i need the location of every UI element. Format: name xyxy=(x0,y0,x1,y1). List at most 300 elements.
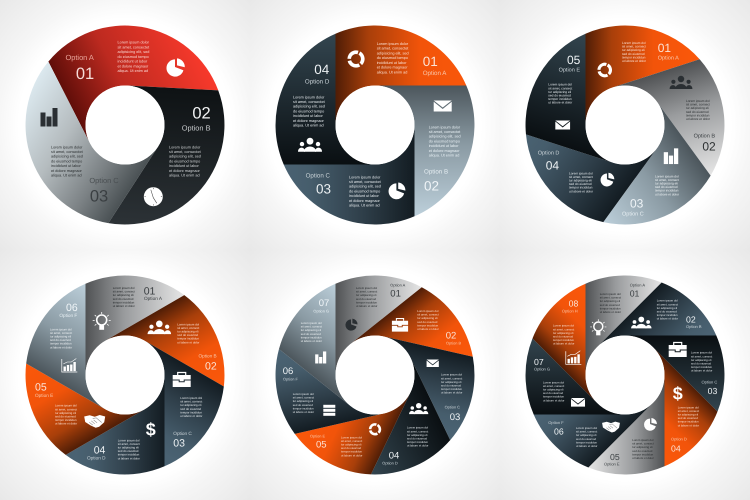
segment: 04 Option D: sed do eiusmod xyxy=(118,449,139,453)
segment: 05 Option E: Lorem ipsum dol xyxy=(55,404,77,408)
segment: 04 Option D: 04 xyxy=(94,444,106,456)
segment: 04 Option D: tempor incididun xyxy=(118,453,140,457)
segment: 08 Option H: Lorem ipsum dol xyxy=(553,324,574,328)
segment: 07 Option G: Lorem ipsum dol xyxy=(543,380,564,384)
segment: 02 Option B: sed do eiusmod xyxy=(177,333,198,337)
segment: 02 Option B: tur adipiscing eli xyxy=(417,316,438,320)
segment: 01 Option A: incididunt ut labor xyxy=(118,60,148,64)
segment: 04 Option D: tempor incididun xyxy=(678,420,699,424)
segment: 03 Option C: do eiusmod tempo xyxy=(349,189,380,193)
segment: 04 Option D: Lorem ipsum dol xyxy=(407,426,428,430)
segment: 01 Option A: adipisicing elit, sed xyxy=(118,50,149,54)
segment: 04 Option D: 04 xyxy=(671,443,681,453)
segment: 03 Option C xyxy=(365,336,481,443)
segment: 04 Option D: sit amet, consect xyxy=(118,442,140,446)
segment: 03 Option C: ut labore et dolor xyxy=(441,391,462,395)
segment: 02 Option B: 02 xyxy=(205,360,217,372)
segment: 01 Option A: ut labore et dolor xyxy=(356,304,377,308)
segment: 03 Option C: incididunt ut labor xyxy=(349,194,379,198)
segment: 07 Option G: sit amet, consect xyxy=(301,325,322,329)
segment: 03 Option C xyxy=(0,61,164,230)
segment: 02 Option B: do eiusmod tempo xyxy=(169,159,200,163)
segment: 06 Option F: tempor incididun xyxy=(293,406,314,410)
segment: 03 Option C: tur adipiscing eli xyxy=(655,182,678,186)
segment: 06 Option F: 06 xyxy=(554,426,564,436)
segment: 08 Option H: sed do eiusmod xyxy=(553,334,573,338)
segment: 05 Option E: Option E xyxy=(604,462,620,467)
segment: 03 Option C: 03 xyxy=(450,412,460,423)
segment: 07 Option G: Lorem ipsum dol xyxy=(301,321,322,325)
segment: 07 Option G: sed do eiusmod xyxy=(301,332,321,336)
hub: centre circle xyxy=(86,336,164,414)
segment: 02 Option B: Option B xyxy=(694,134,715,140)
segment: 02 Option B: incididunt ut labor xyxy=(429,144,459,148)
segment: 03 Option C: sit amet, consect xyxy=(441,376,463,380)
segment: 04 Option D: sed do eiusmod xyxy=(569,182,592,186)
segment: 02 Option B: incididunt ut labor xyxy=(169,164,199,168)
segment: 01 Option A: sed do eiusmod xyxy=(113,297,134,301)
segment: 03 Option C: adipisicing elit, sed xyxy=(51,155,83,159)
hub: centre circle xyxy=(86,86,164,164)
segment: 03 Option C: ut labore et dolor xyxy=(691,369,712,373)
segment: 02 Option B: adipisicing elit, sed xyxy=(169,155,201,159)
segment: 01 Option A: Lorem ipsum dolor xyxy=(377,42,409,46)
segment: 05 Option E: sed do eiusmod xyxy=(548,93,571,97)
segment: 03 Option C: Lorem ipsum dolor xyxy=(51,145,83,149)
segment: 02 Option B: Option B xyxy=(686,324,702,329)
segment: 01 Option A: ut labore et dolor xyxy=(622,59,647,63)
segment: 04 Option D: Option D xyxy=(671,437,687,442)
panel: wheel with 5 options xyxy=(506,23,743,249)
segment: 03 Option C: 03 xyxy=(708,386,717,396)
segment: 02 Option B: ut labore et dolor xyxy=(417,327,439,331)
segment: 04 Option D: tur adipiscing eli xyxy=(678,413,698,417)
segment: 06 Option F: Option F xyxy=(59,313,77,318)
segment: 06 Option F: sit amet, consect xyxy=(576,430,598,434)
segment: 07 Option G: 07 xyxy=(319,298,329,309)
segment: 04 Option D: Lorem ipsum dol xyxy=(678,405,699,409)
segment: 01 Option A: et dolore magnaor xyxy=(377,66,408,70)
segment: 03 Option C: Lorem ipsum dol xyxy=(441,373,462,377)
segment: 03 Option C: Lorem ipsum dol xyxy=(691,351,712,355)
segment: 01 Option A: adipisicing elit, sed xyxy=(377,51,409,55)
segment: 01 Option A: sit amet, consect xyxy=(356,290,378,294)
segment: 03 Option C: 03 xyxy=(630,196,644,210)
segment: 02 Option B xyxy=(105,291,241,426)
segment: 03 Option C xyxy=(284,125,414,224)
segment: 06 Option F: sed do eiusmod xyxy=(50,338,71,342)
segment: 08 Option H: tur adipiscing eli xyxy=(553,331,574,335)
segment: 06 Option F: sed do eiusmod xyxy=(293,403,313,407)
segment: 04 Option D: tur adipiscing eli xyxy=(118,446,139,450)
segment: 04 Option D: Option D xyxy=(382,461,398,466)
segment: 06 Option F: sit amet, consect xyxy=(50,331,72,335)
segment: 05 Option E: sed do eiusmod xyxy=(341,446,361,450)
segment: 03 Option C: 03 xyxy=(90,188,108,206)
segment: 01 Option A: 01 xyxy=(76,65,94,83)
segment: 02 Option B: ut labore et dolor xyxy=(657,317,678,321)
segment: 05 Option E xyxy=(290,355,411,482)
segment: 05 Option E: sit amet, consect xyxy=(341,439,363,443)
segment: 04 Option D: tempor incididun xyxy=(569,186,593,190)
segment: 03 Option C: ut labore et dolor xyxy=(655,192,680,196)
segment: 02 Option B: tempor incididun xyxy=(686,113,710,117)
segment: 08 Option H: ut labore et dolor xyxy=(553,342,574,346)
segment: 05 Option E: Option E xyxy=(559,68,580,74)
segment: 01 Option A: sit amet, consect xyxy=(113,290,135,294)
segment: 01 Option A: aliqua. Ut enim ad xyxy=(377,70,407,74)
segment: 02 Option B: 02 xyxy=(686,315,696,325)
segment: 01 Option A: tempor incididun xyxy=(356,300,377,304)
segment: 04 Option D: ut labore et dolor xyxy=(678,423,699,427)
segment: 04 Option D: Lorem ipsum dol xyxy=(118,438,140,442)
segment: 03 Option C: tempor incididun xyxy=(180,410,202,414)
segment: 07 Option G: tempor incididun xyxy=(543,395,564,399)
segment: 04 Option D: ut labore et dolor xyxy=(569,189,594,193)
hub: centre circle xyxy=(586,336,664,414)
segment: 05 Option E: tempor incididun xyxy=(548,97,572,101)
segment: 02 Option B: 02 xyxy=(192,105,211,123)
segment: 03 Option C: sed do eiusmod xyxy=(691,361,711,365)
segment: 01 Option A: 01 xyxy=(390,289,401,300)
segment: 01 Option A: ut labore et dolor xyxy=(600,310,621,314)
segment: 02 Option B: Option B xyxy=(198,354,217,359)
segment: 04 Option D: Option D xyxy=(538,151,559,157)
segment: 01 Option A xyxy=(586,26,700,125)
segment: 05 Option E xyxy=(9,324,145,459)
segment: 04 Option D: 04 xyxy=(314,62,330,77)
segment: 02 Option B xyxy=(108,85,226,230)
segment: 04 Option D: 04 xyxy=(546,158,559,172)
hub: centre circle xyxy=(586,86,664,164)
segment: 01 Option A: Lorem ipsum dol xyxy=(113,286,135,290)
segment: 01 Option A: sit amet, consect xyxy=(622,45,646,49)
segment: 07 Option G xyxy=(526,338,625,414)
segment: 03 Option C: sit amet, consect xyxy=(691,354,713,358)
segment: 01 Option A: Option A xyxy=(630,282,645,287)
segment: 02 Option B: sit amet, consect xyxy=(686,103,710,107)
segment: 03 Option C: tempor incididun xyxy=(691,365,712,369)
segment: 02 Option B: Lorem ipsum dol xyxy=(417,309,439,313)
segment: 06 Option F: Lorem ipsum dol xyxy=(50,327,72,331)
segment: 08 Option H: tempor incididun xyxy=(553,338,574,342)
segment: 03 Option C: Lorem ipsum dolor xyxy=(349,175,381,179)
segment: 05 Option E: tempor incididun xyxy=(55,418,77,422)
segment: 05 Option E: Lorem ipsum dol xyxy=(632,438,654,442)
segment: 04 Option D: tur adipiscing eli xyxy=(407,433,428,437)
segment: 02 Option B: 02 xyxy=(446,331,456,342)
segment: 03 Option C: sed do eiusmod xyxy=(655,185,678,189)
segment: 02 Option B: tur adipiscing eli xyxy=(686,106,709,110)
segment: 06 Option F: ut labore et dolor xyxy=(293,410,314,414)
segment: 05 Option E: tempor incididun xyxy=(632,452,654,456)
segment: 04 Option D: aliqua. Ut enim ad xyxy=(293,124,324,128)
segment: 02 Option B: sit amet, consectet xyxy=(169,150,202,154)
segment: 06 Option F: Option F xyxy=(548,420,564,425)
segment: 03 Option C: aliqua. Ut enim ad xyxy=(349,204,380,208)
segment: 05 Option E: sed do eiusmod xyxy=(632,449,653,453)
segment: 01 Option A: 01 xyxy=(423,54,438,69)
segment: 08 Option H xyxy=(527,279,651,403)
segment: 01 Option A xyxy=(45,0,219,153)
segment: 03 Option C: Option C xyxy=(173,431,192,436)
hub: centre circle xyxy=(336,86,414,164)
segment: 03 Option C: sit amet, consectet xyxy=(349,180,382,184)
segment: 03 Option C xyxy=(565,102,715,249)
segment: 06 Option F: sed do eiusmod xyxy=(576,437,596,441)
segment: 02 Option B: Option B xyxy=(182,124,211,133)
segment: 01 Option A: tur adipiscing eli xyxy=(356,293,377,297)
segment: 02 Option B: sit amet, consect xyxy=(177,326,200,330)
segment: 03 Option C: Option C xyxy=(89,176,119,185)
segment: 03 Option C: Option C xyxy=(306,172,331,179)
segment: 01 Option A: Lorem ipsum dol xyxy=(600,292,621,296)
segment: 01 Option A: Option A xyxy=(66,53,94,62)
segment: 02 Option B: tempor incididun xyxy=(417,323,439,327)
segment: 06 Option F: sit amet, consect xyxy=(293,396,314,400)
segment: 01 Option A: Option A xyxy=(423,70,447,77)
segment: 07 Option G: sed do eiusmod xyxy=(543,391,563,395)
panel: wheel with 7 options xyxy=(268,276,482,485)
segment: 04 Option D: $ xyxy=(146,420,156,440)
segment: 06 Option F: tur adipiscing eli xyxy=(50,335,71,339)
segment: 03 Option C: 03 xyxy=(316,181,331,196)
segment: 05 Option E: 05 xyxy=(610,452,620,462)
segment: 06 Option F: 06 xyxy=(283,366,293,377)
segment: 07 Option G: tur adipiscing eli xyxy=(301,328,321,332)
segment: 01 Option A: sed do eiusmod xyxy=(356,297,376,301)
segment: 03 Option C: incididunt ut labor xyxy=(51,164,81,168)
segment: 01 Option A: sit amet, consect xyxy=(600,296,621,300)
segment: 07 Option G: ut labore et dolor xyxy=(301,339,322,343)
hub: centre circle xyxy=(336,336,414,414)
segment: 06 Option F: ut labore et dolor xyxy=(576,444,597,448)
segment: 06 Option F: Option F xyxy=(283,376,299,381)
segment: 05 Option E: Lorem ipsum dol xyxy=(341,435,362,439)
segment: 05 Option E: tur adipiscing eli xyxy=(548,90,571,94)
segment: 04 Option D xyxy=(276,34,375,164)
segment: 03 Option C: tur adipiscing eli xyxy=(441,380,462,384)
segment: 02 Option B: sed do eiusmod xyxy=(417,320,438,324)
segment: 01 Option A xyxy=(586,276,662,375)
segment: 02 Option B xyxy=(375,86,474,216)
segment: 03 Option C xyxy=(625,336,724,412)
segment: 04 Option D xyxy=(333,358,454,485)
segment: 02 Option B: Lorem ipsum dol xyxy=(657,299,678,303)
segment: 04 Option D: ut labore et dolor xyxy=(407,444,428,448)
segment: 04 Option D: ut labore et dolor xyxy=(118,456,140,460)
segment: 05 Option E: Option E xyxy=(35,393,53,398)
segment: 06 Option F: Lorem ipsum dol xyxy=(576,426,597,430)
segment: 01 Option A: sed do eiusmod xyxy=(622,52,645,56)
segment: 03 Option C: tempor incididun xyxy=(441,387,462,391)
segment: 04 Option D: Lorem ipsum dolor xyxy=(293,95,325,99)
segment: 07 Option G: sit amet, consect xyxy=(543,384,565,388)
segment: 04 Option D: Option D xyxy=(87,455,106,460)
segment: 05 Option E: Lorem ipsum dol xyxy=(548,83,572,87)
segment: 02 Option B: adipisicing elit, sed xyxy=(429,135,461,139)
segment: 04 Option D xyxy=(66,375,164,474)
segment: 02 Option B: aliqua. Ut enim ad xyxy=(429,154,459,158)
segment: 03 Option C: Option C xyxy=(445,404,460,409)
segment: 02 Option B: et dolore magnaor xyxy=(429,149,460,153)
segment: 02 Option B: sed do eiusmod xyxy=(686,110,709,114)
segment: 03 Option C: adipisicing elit, sed xyxy=(349,185,381,189)
segment: 01 Option A: 01 xyxy=(658,41,671,55)
segment: 06 Option F: tur adipiscing eli xyxy=(576,433,597,437)
segment: 01 Option A: 01 xyxy=(144,286,156,298)
segment: 03 Option C: sit amet, consect xyxy=(655,178,679,182)
segment: 01 Option A xyxy=(336,26,466,125)
segment: 01 Option A: tur adipiscing eli xyxy=(600,299,620,303)
segment: 05 Option E: 05 xyxy=(35,382,47,394)
segment: 03 Option C: Lorem ipsum dol xyxy=(180,396,202,400)
segment: 07 Option G: 07 xyxy=(534,357,544,367)
segment: 01 Option A: 01 xyxy=(630,288,640,298)
segment: 01 Option A: aliqua. Ut enim ad xyxy=(118,69,148,73)
segment: 04 Option D: sit amet, consect xyxy=(569,175,593,179)
segment: 02 Option B: Lorem ipsum dolor xyxy=(429,125,461,129)
segment: 02 Option B xyxy=(613,57,743,196)
segment: 03 Option C: ut labore et dolor xyxy=(180,414,202,418)
segment: 02 Option B xyxy=(350,282,482,412)
segment: 01 Option A xyxy=(86,276,184,375)
segment: 01 Option A: Lorem ipsum dol xyxy=(622,41,646,45)
segment: 01 Option A: Lorem ipsum dol xyxy=(356,286,377,290)
segment: 02 Option B: ut labore et dolor xyxy=(686,117,711,121)
segment: 05 Option E xyxy=(518,23,648,163)
segment: 01 Option A: tempor incididun xyxy=(113,300,135,304)
segment: 04 Option D: Lorem ipsum dol xyxy=(569,171,593,175)
segment: 08 Option H: Option H xyxy=(562,309,578,314)
segment: 06 Option F: 06 xyxy=(66,302,78,314)
segment: 05 Option E: ut labore et dolor xyxy=(632,456,654,460)
segment: 05 Option E xyxy=(588,375,664,474)
segment: 02 Option B: tempor incididun xyxy=(177,337,199,341)
segment: 04 Option D: do eiusmod tempo xyxy=(293,109,324,113)
segment: 08 Option H: sit amet, consect xyxy=(553,327,575,331)
segment: 01 Option A: Option A xyxy=(144,296,163,301)
segment: 02 Option B: Lorem ipsum dolor xyxy=(169,145,201,149)
segment: 06 Option F xyxy=(529,349,653,473)
segment: 07 Option G: Option G xyxy=(313,309,329,314)
segment: 04 Option D xyxy=(599,347,723,471)
segment: 04 Option D: et dolore magnaor xyxy=(293,119,325,123)
segment: 01 Option A: tur adipiscing eli xyxy=(622,48,645,52)
segment: 03 Option C: sit amet, consect xyxy=(180,400,203,404)
segment: 03 Option C: tur adipiscing eli xyxy=(180,403,202,407)
segment: 04 Option D: adipisicing elit, sed xyxy=(293,105,325,109)
segment: 04 Option D: sed do eiusmod xyxy=(407,436,427,440)
segment: 05 Option E: sit amet, consect xyxy=(548,86,572,90)
segment: 03 Option C: aliqua. Ut enim ad xyxy=(51,174,82,178)
segment: 02 Option B: Option B xyxy=(446,340,462,345)
segment: 02 Option B: tempor incididun xyxy=(657,313,678,317)
segment: 03 Option C: tempor incididun xyxy=(655,189,679,193)
segment: 02 Option B: Option B xyxy=(424,169,448,176)
segment: 06 Option F: tempor incididun xyxy=(50,342,72,346)
segment: 01 Option A: Option A xyxy=(658,55,679,61)
segment: 01 Option A: tur adipiscing eli xyxy=(113,293,134,297)
segment: 01 Option A: sit amet, consectet xyxy=(377,47,409,51)
segment: 07 Option G: ut labore et dolor xyxy=(543,398,564,402)
segment: 05 Option E: tur adipiscing eli xyxy=(55,411,76,415)
segment: 03 Option C: sit amet, consectet xyxy=(51,150,84,154)
panel: wheel with 3 options xyxy=(0,0,226,230)
segment: 02 Option B: sit amet, consect xyxy=(417,313,439,317)
segment: 07 Option G xyxy=(273,276,404,406)
segment: 02 Option B: ut labore et dolor xyxy=(177,340,199,344)
segment: 01 Option A: do eiusmod tempo xyxy=(377,56,408,60)
segment: 02 Option B: aliqua. Ut enim ad xyxy=(169,174,200,178)
segment: 04 Option D: sed do eiusmod xyxy=(678,416,698,420)
segment: 01 Option A: tempor incididun xyxy=(622,55,646,59)
segment: 02 Option B: Lorem ipsum dol xyxy=(686,99,710,103)
segment: 01 Option A: ut labore et dolor xyxy=(113,304,135,308)
segment: 05 Option E: 05 xyxy=(316,439,327,450)
panel: wheel with 4 options xyxy=(276,26,474,224)
segment: 02 Option B: do eiusmod tempo xyxy=(429,139,460,143)
panel: wheel with 6 options xyxy=(9,274,241,476)
segment: 06 Option F: tempor incididun xyxy=(576,440,597,444)
segment: 03 Option C: sed do eiusmod xyxy=(441,383,461,387)
segment: 04 Option D: tur adipiscing eli xyxy=(569,179,592,183)
segment: 04 Option D: $ xyxy=(673,384,683,404)
segment: 05 Option E: Option E xyxy=(310,434,326,439)
segment: 05 Option E: tur adipiscing eli xyxy=(632,445,653,449)
segment: 03 Option C xyxy=(95,341,231,476)
segment: 03 Option C: Option C xyxy=(622,211,644,217)
segment: 03 Option C: et dolore magnaor xyxy=(349,199,381,203)
segment: 06 Option F: tur adipiscing eli xyxy=(293,399,313,403)
segment: 04 Option D xyxy=(506,81,657,229)
segment: 02 Option B: sed do eiusmod xyxy=(657,310,677,314)
segment: 05 Option E: ut labore et dolor xyxy=(548,101,573,105)
segment: 01 Option A: sit amet, consectet xyxy=(118,45,150,49)
segment: 05 Option E: ut labore et dolor xyxy=(341,453,362,457)
segment: 03 Option C: tur adipiscing eli xyxy=(691,358,712,362)
segment: 03 Option C: 03 xyxy=(173,438,185,450)
segment: 05 Option E: sit amet, consect xyxy=(55,407,77,411)
segment: 01 Option A: et dolore magnaor xyxy=(118,64,149,68)
segment: 02 Option B: sit amet, consectet xyxy=(429,130,461,134)
segment: 01 Option A: tempor incididun xyxy=(600,306,621,310)
segment: 04 Option D: sit amet, consect xyxy=(407,429,429,433)
segment: 04 Option D: sit amet, consectet xyxy=(293,100,326,104)
segment: 01 Option A: do eiusmod tempo xyxy=(118,55,149,59)
segment: 02 Option B xyxy=(597,277,721,401)
segment: 03 Option C: sed do eiusmod xyxy=(180,407,201,411)
segment: 06 Option F: ut labore et dolor xyxy=(50,345,72,349)
segment: 08 Option H: 08 xyxy=(569,299,578,309)
segment: 03 Option C: Lorem ipsum dol xyxy=(655,174,679,178)
segment: 06 Option F xyxy=(19,274,155,409)
segment: 01 Option A: sed do eiusmod xyxy=(600,303,620,307)
segment: 02 Option B: tur adipiscing eli xyxy=(657,306,677,310)
segment: 02 Option B: et dolore magnaor xyxy=(169,169,201,173)
segment: 01 Option A: Option A xyxy=(390,283,406,288)
segment: 04 Option D: incididunt ut labor xyxy=(293,114,323,118)
segment: 02 Option B: tur adipiscing eli xyxy=(177,330,199,334)
segment: 01 Option A: incididunt ut labor xyxy=(377,61,407,65)
segment: 03 Option C: Option C xyxy=(702,379,717,384)
segment: 02 Option B: sit amet, consect xyxy=(657,302,678,306)
segment: 02 Option B: Lorem ipsum dol xyxy=(177,322,199,326)
segment: 04 Option D: 04 xyxy=(389,450,399,461)
segment: 03 Option C: do eiusmod tempo xyxy=(51,159,82,163)
segment: 07 Option G: Option G xyxy=(534,367,550,372)
segment: 04 Option D: sit amet, consect xyxy=(678,409,699,413)
